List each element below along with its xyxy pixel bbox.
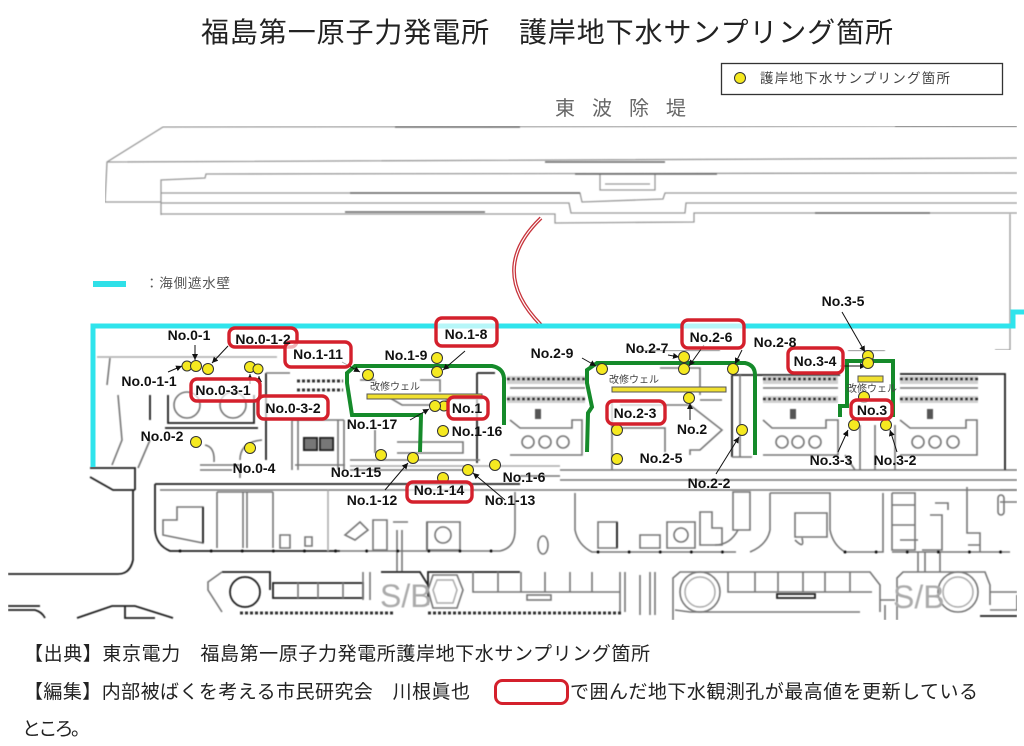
reactor unit C (900, 374, 1005, 470)
well number labels: No.0-2 (141, 428, 184, 444)
legend: sampling location (722, 64, 1002, 94)
S/B markings: S/B (380, 578, 432, 614)
heading: east breakwater: 東波除堤 (555, 97, 686, 120)
well number labels: No.1-9 (385, 347, 428, 363)
well markers (182, 350, 892, 484)
well number labels: No.3-4 (794, 353, 837, 369)
reactor unit B (763, 376, 838, 455)
well number labels: No.0-4 (233, 460, 276, 476)
red highlight boxes (191, 318, 892, 502)
renovated well labels: 改修ウェル (370, 380, 420, 393)
well number labels: No.2-2 (688, 475, 731, 491)
lower tanks and S/B buildings (208, 572, 1017, 620)
well number labels: No.0-3-2 (265, 400, 321, 416)
well number labels: No.3-5 (822, 293, 865, 309)
unit 2 well area (612, 350, 840, 470)
plant plan drawing (8, 350, 1017, 620)
yellow bars (367, 376, 883, 399)
well number labels: No.1-8 (445, 326, 488, 342)
well number labels: No.2-5 (640, 450, 683, 466)
well number labels: No.3-3 (810, 452, 853, 468)
well number labels: No.0-3-1 (195, 382, 251, 398)
editor note: で囲んだ地下水観測孔が最高値を更新している (570, 681, 978, 703)
editor note (22, 680, 978, 740)
legend: seaside impermeable wall: ：海側遮水壁 (145, 276, 230, 291)
well number labels: No.2-8 (754, 334, 797, 350)
renovated well labels: 改修ウェル (847, 382, 897, 395)
lower middle buildings (155, 484, 1017, 572)
well number labels: No.2 (677, 421, 707, 437)
well number labels: No.2-6 (690, 329, 733, 345)
green wells lines (347, 361, 893, 455)
well number labels: No.0-1-1 (121, 373, 177, 389)
well number labels: No.1-13 (485, 492, 535, 508)
unit 3 well area (845, 350, 895, 470)
well number labels: No.2-7 (626, 340, 669, 356)
reactor unit A (507, 376, 585, 455)
well number labels: No.1-6 (503, 469, 546, 485)
well number labels: No.0-1-2 (235, 331, 291, 347)
well number labels: No.0-1 (168, 327, 211, 343)
well number labels: No.3 (857, 402, 887, 418)
source note: 【出典】東京電力 福島第一原子力発電所護岸地下水サンプリング箇所 (24, 643, 650, 665)
title: 福島第一原子力発電所 護岸地下水サンプリング箇所 (201, 17, 893, 48)
editor note: ところ。 (22, 719, 90, 740)
well number labels: No.1-11 (293, 346, 343, 362)
S/B markings (380, 578, 945, 615)
well number labels (121, 293, 917, 508)
renovated well labels (370, 373, 897, 395)
well number labels: No.2-3 (614, 405, 657, 421)
editor note: 【編集】内部被ばくを考える市民研究会 川根眞也 (24, 681, 470, 703)
renovated well labels: 改修ウェル (609, 373, 659, 386)
S/B markings: S/B (893, 579, 945, 615)
legend: seaside impermeable wall (93, 276, 230, 291)
legend: sampling location: 護岸地下水サンプリング箇所 (760, 70, 950, 86)
red arc (514, 218, 541, 325)
unit 1 turbine area (292, 373, 495, 470)
well number labels: No.1 (452, 400, 482, 416)
breakwater outline (105, 126, 1017, 350)
well number labels: No.2-9 (531, 345, 574, 361)
well number labels: No.1-14 (414, 482, 464, 498)
well number labels: No.3-2 (874, 452, 917, 468)
well number labels: No.1-17 (347, 416, 397, 432)
well number labels: No.1-16 (452, 423, 502, 439)
road bands (155, 466, 1017, 490)
seaside impermeable wall (cyan) (93, 312, 1024, 467)
well number labels: No.1-15 (331, 464, 381, 480)
arrows (168, 312, 897, 500)
well number labels: No.1-12 (347, 492, 397, 508)
unit 0 intake area (8, 357, 290, 618)
